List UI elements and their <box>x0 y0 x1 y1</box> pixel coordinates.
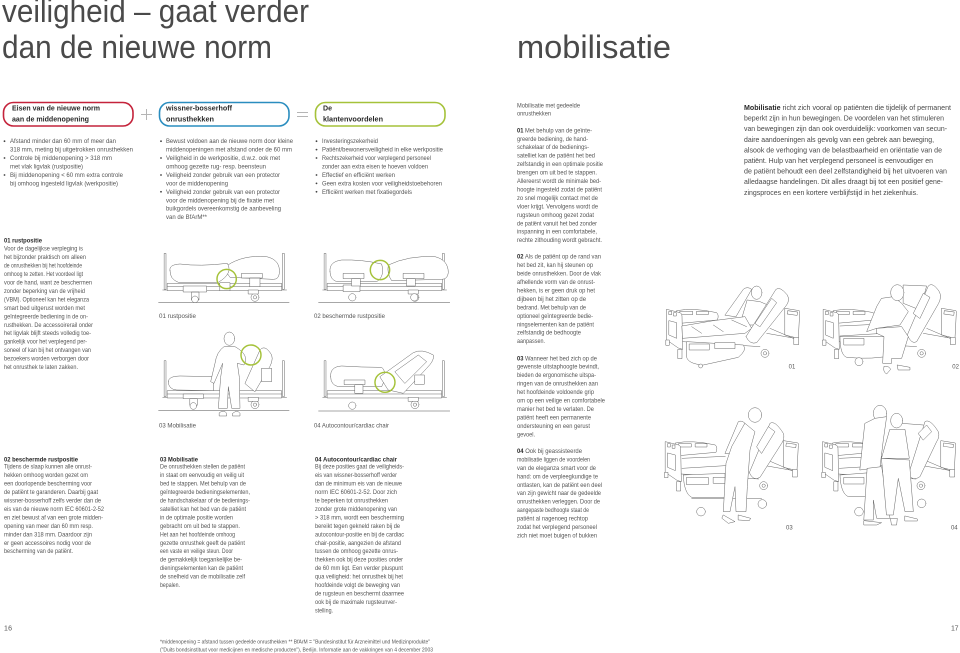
text block: 04 Autocontour/cardiac chair: ook bij de maximale rugsteunver- <box>315 599 397 606</box>
text block: step 02: dijbeen bij het zitten op de <box>517 296 587 303</box>
text block: 02 beschermde rustpositie: wissner-bosserhoff zelfs verder dan de <box>3 498 102 504</box>
text block: 02 beschermde rustpositie: hekken omhoog worden gezet om <box>4 472 88 479</box>
heading box: eisen van de nieuwe norm: aan de middenopening <box>12 114 89 124</box>
text block: step 01: rechte zithouding wordt gebracht. <box>517 237 602 244</box>
text block: 03 Mobilisatie: Het aan het hoofdeinde omhoog <box>160 531 235 538</box>
text block: 01 rustpositie: gankelijk voor het verplegend per- <box>4 339 87 346</box>
bullet list: eisen: bij omhoog ingesteld ligvlak (werkpositie) <box>10 180 118 187</box>
text block: step 03: manier het bed te verlaten. De <box>517 406 595 413</box>
heading box: wissner-bosserhoff onrusthekken <box>160 102 289 126</box>
text block: 01 rustpositie: soneel of kan bij het ontvangen van <box>4 347 91 354</box>
text block: step 04: patiënt al nagenoeg rechtop <box>517 516 589 523</box>
text block: step 01: satelliet kan de patiënt het bed <box>517 153 595 160</box>
text block: 01 rustpositie: omhoog te zetten. Het voordeel ligt <box>4 271 83 278</box>
text block: 03 Mobilisatie: bepalen. <box>160 582 180 589</box>
text block: 04 Autocontour/cardiac chair: stelling. <box>315 607 333 614</box>
text block: 04 Autocontour/cardiac chair: bereikt tegen gekneld raken bij de <box>315 523 401 530</box>
text block: 03 Mobilisatie: geïntegreerde bedieningselementen, <box>160 489 250 496</box>
text block: 04 Autocontour/cardiac chair: dan de minimum eis van de nieuwe <box>315 481 403 488</box>
text block: step 04: van zijn gewicht naar de gedeelde <box>517 490 602 497</box>
text block: 01 rustpositie: het onrusthek te laten zakken. <box>4 364 78 371</box>
intro paragraph: mobilisatie: zingsproces en een kortere verblijfstijd in het ziekenhuis. <box>744 189 918 197</box>
text block: step 01: inspanning in een comfortabele, <box>517 229 597 236</box>
text block: step 04: zodat het verplegend personeel <box>517 524 597 531</box>
heading box: de klantenvoordelen <box>316 102 445 126</box>
text block: step 04: hand: om de verpleegkundige te <box>517 473 599 480</box>
text block: 03 Mobilisatie: de handschakelaar of de bedienings- <box>160 498 250 504</box>
bullet list: klantenvoordelen: Investeringszekerheid <box>322 138 378 145</box>
text block: step 01: zo snel mogelijk contact met de <box>517 195 599 202</box>
text block: step 01: greerde bediening, de hand- <box>517 136 588 143</box>
text block: step 02 <box>517 254 602 345</box>
text block: 04 Autocontour/cardiac chair: eis van wissner-bosserhoff verder <box>315 472 397 479</box>
text block: step 02: bedrand. Met behulp van de <box>517 304 587 311</box>
text block: step 01: 01 Met behulp van de geïnte- <box>517 127 592 134</box>
heading box: wissner-bosserhoff onrusthekken: wissner-bosserhoff <box>165 104 233 112</box>
text block: 02 beschermde rustpositie: bescherming van de patiënt. <box>4 548 73 555</box>
text block: 04 Autocontour/cardiac chair: hoofdeinde volgt de beweging van <box>315 582 400 589</box>
page number 16: 16 <box>4 626 12 632</box>
text block: 01 rustpositie: Voor de dagelijkse verpleging is <box>4 246 83 253</box>
text block: 03 Mobilisatie: De onrusthekken stellen de patiënt <box>160 464 245 471</box>
label: 01 rustpositie: 01 rustpositie <box>159 313 197 320</box>
text block: 03 Mobilisatie: dieningselementen kan de patiënt <box>160 565 243 572</box>
text block: step 02: 02 Als de patiënt op de rand van <box>517 254 601 261</box>
text block: 03 Mobilisatie: de gemakkelijk toegankelijke be- <box>160 557 242 564</box>
bullet list: onrusthekken: omhoog gezette rug- resp. beensteun <box>166 164 266 170</box>
illustration: 02 patient sitting on bed edge <box>823 285 960 374</box>
text block: step 02: aanpassen. <box>517 338 545 345</box>
text block: step 04: mobilisatie liggen de voordelen <box>517 456 590 463</box>
text block: 03 Mobilisatie: 03 Mobilisatie <box>160 457 199 464</box>
intro paragraph: mobilisatie: patiënt. Hulp van het verplegend personeel is eenvoudiger en <box>744 157 933 165</box>
bullet list: onrusthekken: Veiligheid in de werkpositie, d.w.z. ook met <box>166 155 280 162</box>
text block: 01 rustpositie: (VBM). Optioneel kan het eleganza <box>4 296 90 303</box>
text block: 03 Mobilisatie: gezette onrusthek geeft de patiënt <box>160 540 245 547</box>
bullet list: klantenvoordelen <box>316 138 444 196</box>
text block: step 03: om op een veilige en comfortabele <box>517 398 606 404</box>
bullet list: eisen: Controle bij middenopening > 318 mm <box>10 155 112 162</box>
text block: step 01: de patiënt vanuit het bed zonder <box>517 220 597 227</box>
intro paragraph: mobilisatie: de patiënt behoudt een deel zelfstandigheid bij het uitvoeren van <box>744 168 947 176</box>
text block: mobilisatie met gedeelde onrusthekken: onrusthekken <box>517 111 551 118</box>
text block: 03 Mobilisatie: satelliet kan het bed van de patiënt <box>160 506 246 513</box>
illustration: 03 patient standing next to bed <box>665 408 798 531</box>
text block: 01 rustpositie: rusthekken. De accessoirerail onder <box>4 322 93 329</box>
heading box: de klantenvoordelen: De <box>323 104 332 112</box>
equals sign <box>297 112 308 116</box>
text block: 04 Autocontour/cardiac chair <box>315 457 405 614</box>
heading box: wissner-bosserhoff onrusthekken: onrusthekken <box>166 114 214 124</box>
intro paragraph: mobilisatie: alsook de verhoging van de belastbaarheid en oriëntatie van de <box>744 146 942 154</box>
bullet list: onrusthekken: middenopeningen met afstand onder de 60 mm <box>166 147 292 154</box>
text block: step 03: ondersteuning en een gerust <box>517 423 590 430</box>
illustration: bed 01 rustpositie <box>158 253 289 303</box>
illustration: 02 patient sitting on bed edge: 02 <box>952 364 960 370</box>
text block: step 04: onrusthekken verleggen. Door de <box>517 499 601 506</box>
text block: 02 beschermde rustpositie: en ziet bewust af van een grote midden- <box>4 514 103 521</box>
text block: 01 rustpositie: bezoekers worden verborgen door <box>4 356 89 363</box>
illustration: 03 patient standing next to bed: 03 <box>786 525 793 531</box>
text block: 01 rustpositie: 01 rustpositie <box>4 237 43 244</box>
title: mobilisatie: mobilisatie <box>517 29 671 65</box>
text block: 03 Mobilisatie: in de optimale positie worden <box>160 514 233 521</box>
text block: 04 Autocontour/cardiac chair: > 318 mm, wordt een bescherming <box>315 514 404 521</box>
page number 17: 17 <box>951 626 959 632</box>
bullet list: eisen: 318 mm, meting bij uitgetrokken onrusthekken <box>10 147 133 154</box>
text block: 03 Mobilisatie: een vaste en veilige steun. Door <box>160 548 233 555</box>
bullet list: klantenvoordelen: Geen extra kosten voor veiligheidstoebehoren <box>322 180 442 187</box>
heading box: de klantenvoordelen: klantenvoordelen <box>323 114 383 124</box>
text block: 01 rustpositie <box>4 237 93 371</box>
text block: 03 Mobilisatie: in staat om eenvoudig en veilig uit <box>160 472 244 479</box>
text block: step 02: ningselementen kan de patiënt <box>517 321 594 328</box>
bullet list: eisen: Bij middenopening < 60 mm extra controle <box>10 172 124 179</box>
text block: 02 beschermde rustpositie: minder dan 318 mm. Daardoor zijn <box>4 531 92 538</box>
bullet list: onrusthekken: Veiligheid zonder gebruik van een protector <box>166 189 280 196</box>
intro paragraph: mobilisatie: alledaagse handelingen. Dit alles draagt bij tot een positief gene- <box>744 178 944 186</box>
text block: step 04 <box>517 448 602 540</box>
text block: step 03: gewenste uitstaphoogte bevindt, <box>517 364 599 371</box>
label: 04 Autocontour/cardiac chair: 04 Autocontour/cardiac chair <box>314 422 389 430</box>
bullet list: klantenvoordelen: Rechtszekerheid voor verplegend personeel <box>322 155 431 162</box>
text block: step 03: het hoofdeinde voldoende grip <box>517 389 595 396</box>
bullet list: onrusthekken: Veiligheid zonder gebruik van een protector <box>166 172 280 179</box>
text block: 04 Autocontour/cardiac chair: 04 Autocontour/cardiac chair <box>315 457 398 464</box>
text block: step 04: zich niet moet buigen of bukken <box>517 532 597 540</box>
text block: step 03: gevoel. <box>517 431 535 438</box>
text block: step 02: afhellende vorm van de onrust- <box>517 279 595 286</box>
text block: 01 rustpositie: smart bed uitgerust worden met <box>4 305 85 312</box>
text block: 04 Autocontour/cardiac chair: Bij deze posities gaat de veiligheids- <box>315 464 404 471</box>
bullet list: onrusthekken: voor de middenopening <box>166 180 228 187</box>
bullet list: onrusthekken: voor de middenopening bij de fixatie met <box>166 197 274 204</box>
illustration: 04 nurse helping patient stand <box>822 405 958 531</box>
text block: 02 beschermde rustpositie: eis van de nieuwe norm IEC 60601-2-52 <box>4 506 105 513</box>
label: 03 Mobilisatie: 03 Mobilisatie <box>159 422 197 430</box>
text block: 04 Autocontour/cardiac chair: qua veiligheid: het onrusthek bij het <box>315 574 403 581</box>
text block: step 03: patiënt heeft een permanente <box>517 414 592 421</box>
heading box: eisen van de nieuwe norm: Eisen van de nieuwe norm <box>12 104 100 112</box>
text block: 02 beschermde rustpositie: Tijdens de slaap kunnen alle onrust- <box>4 464 92 471</box>
text block: step 03: bieden de ergonomische uitspa- <box>517 372 596 379</box>
text block: step 04: 04 Ook bij geassisteerde <box>517 448 583 455</box>
text block: step 01: zelfstandig in een optimale positie <box>517 161 604 168</box>
intro paragraph: mobilisatie: Mobilisatie richt zich vooral op patiënten die tijdelijk of permanent <box>744 104 951 112</box>
text block: 04 Autocontour/cardiac chair: autocontour-positie en bij de cardiac <box>315 531 404 538</box>
footnote: *middenopening = afstand tussen gedeelde onrusthekken ** BfArM = "Bundesinstitut für Arzneimittel und Medizinprodukte" <box>160 640 430 646</box>
illustration: 01 patient in bed with raised rail <box>666 286 800 370</box>
text block: step 02: optioneel geïntegreerde bedie- <box>517 313 593 320</box>
text block: 04 Autocontour/cardiac chair: zonder grote middenopening van <box>315 506 397 513</box>
intro paragraph: mobilisatie: beperkt zijn in hun bewegingen. De voordelen van het stimuleren <box>744 115 944 123</box>
text block: 02 beschermde rustpositie: er geen accessoires nodig voor de <box>4 540 92 547</box>
intro paragraph: mobilisatie <box>744 104 951 197</box>
text block: step 03: 03 Wanneer het bed zich op de <box>517 355 598 362</box>
illustration: 04 nurse helping patient stand: 04 <box>951 525 958 531</box>
bullet list: klantenvoordelen: Patiënt/bewonersveiligheid in elke werkpositie <box>322 147 444 154</box>
text block: step 01 <box>517 127 604 244</box>
bullet list: onrusthekken: van de BfArM** <box>166 214 208 221</box>
bullet list: onrusthekken <box>160 138 294 221</box>
intro paragraph: mobilisatie: daire aandoeningen als gevolg van een gebrek aan beweging, <box>744 136 934 144</box>
text block: step 01: vloer krijgt. Vervolgens wordt de <box>517 203 599 210</box>
text block: step 04: van de eleganza smart voor de <box>517 465 597 472</box>
text block: 02 beschermde rustpositie: 02 beschermde rustpositie <box>4 457 79 464</box>
illustration: bed 02 beschermde rustpositie <box>318 253 450 303</box>
text block: step 04: ontlasten, kan de patiënt een deel <box>517 482 602 489</box>
bullet list: onrusthekken: buikgordels overeenkomstig de aanbeveling <box>166 206 281 213</box>
text block: 03 Mobilisatie: gebracht om uit bed te stappen. <box>160 523 240 530</box>
text block: step 03 <box>517 355 606 438</box>
text block: 04 Autocontour/cardiac chair: chair-positie, aangezien de afstand <box>315 540 401 547</box>
text block: 02 beschermde rustpositie <box>3 457 105 555</box>
text block: 03 Mobilisatie <box>160 457 250 589</box>
text block: step 01: schakelaar of de bedienings- <box>517 144 589 151</box>
text block: 03 Mobilisatie: bed te stappen. Met behulp van de <box>160 481 247 488</box>
bullet list: eisen: met vlak ligvlak (rustpositie) <box>10 164 83 170</box>
text block: step 04: aangepaste bedhoogte staat de <box>517 507 590 514</box>
bullet list: eisen: Afstand minder dan 60 mm of meer dan <box>10 138 116 145</box>
text block: 04 Autocontour/cardiac chair: tussen de omhoog gezette onrus- <box>315 548 398 555</box>
bullet list: klantenvoordelen: Efficiënt werken met fixatiegordels <box>322 189 412 196</box>
text block: step 02: hekken, is er geen druk op het <box>517 288 595 294</box>
text block: 03 Mobilisatie: de snelheid van de mobilisatie zelf <box>160 574 245 581</box>
label: 02 beschermde rustpositie: 02 beschermde rustpositie <box>314 313 386 320</box>
footnote <box>160 640 433 653</box>
text block: 01 rustpositie: het ligvlak blijft steeds volledig toe- <box>4 330 91 337</box>
title: veiligheid: dan de nieuwe norm <box>2 29 272 65</box>
text block: 04 Autocontour/cardiac chair: de rugsteun en beschermt daarmee <box>315 590 405 598</box>
text block: step 03: ringen van de onrusthekken aan <box>517 381 598 388</box>
text block: 02 beschermde rustpositie: de patiënt te garanderen. Daarbij gaat <box>4 489 98 496</box>
text block: 04 Autocontour/cardiac chair: te beperken tot onrusthekken <box>315 498 388 504</box>
heading box: eisen van de nieuwe norm <box>4 102 133 126</box>
text block: mobilisatie met gedeelde onrusthekken: Mobilisatie met gedeelde <box>517 102 581 109</box>
text block: 01 rustpositie: voor de hand, want ze beschermen <box>4 280 92 286</box>
text block: 02 beschermde rustpositie: opening van meer dan 60 mm resp. <box>4 523 93 530</box>
title: veiligheid <box>2 0 309 65</box>
intro paragraph: mobilisatie: van bewegingen zijn dan ook overduidelijk: voorkomen van secun- <box>744 125 948 133</box>
text block: step 01: brengen om uit bed te stappen. <box>517 170 597 177</box>
illustration: bed 04 autocontour <box>318 351 450 411</box>
text block: 04 Autocontour/cardiac chair: thekken ook bij deze posities onder <box>315 557 403 564</box>
bullet list: klantenvoordelen: Effectief en efficiënt werken <box>322 172 395 179</box>
illustration: bed 03 mobilisatie <box>158 332 289 416</box>
text block: 02 beschermde rustpositie: een doorlopende bescherming voor <box>4 481 92 488</box>
text block: 04 Autocontour/cardiac chair: norm IEC 60601-2-52. Door zich <box>315 489 397 496</box>
plus sign <box>141 109 152 120</box>
bullet list: klantenvoordelen: zonder aan extra eisen te hoeven voldoen <box>322 164 428 170</box>
text block: step 02: beide onrusthekken. Door de vlak <box>517 271 602 278</box>
text block: 01 rustpositie: geïntegreerde bediening in de on- <box>4 313 88 320</box>
bullet list: eisen <box>4 138 133 187</box>
illustration: 01 patient in bed with raised rail: 01 <box>789 364 796 370</box>
text block: 01 rustpositie: de onrusthekken bij het hoofdeinde <box>4 263 82 270</box>
text block: step 01: Allereerst wordt de minimale bed- <box>517 178 601 185</box>
text block: step 02: zelfstandig de bedhoogte <box>517 330 582 337</box>
text block: step 01: rugsteun omhoog gezet zodat <box>517 212 594 219</box>
bullet list: onrusthekken: Bewust voldoen aan de nieuwe norm door kleine <box>166 138 294 145</box>
text block: step 02: het bed zit, kan hij steunen op <box>517 262 594 269</box>
text block: step 01: hoogte ingesteld zodat de patiënt <box>517 186 602 194</box>
text block: 01 rustpositie: zonder beperking van de vrijheid <box>4 288 85 295</box>
text block: mobilisatie met gedeelde onrusthekken <box>517 102 581 118</box>
text block: 04 Autocontour/cardiac chair: de 60 mm ligt. Een verder pluspunt <box>315 565 403 572</box>
text block: 01 rustpositie: het bijzonder praktisch om alleen <box>4 254 86 261</box>
